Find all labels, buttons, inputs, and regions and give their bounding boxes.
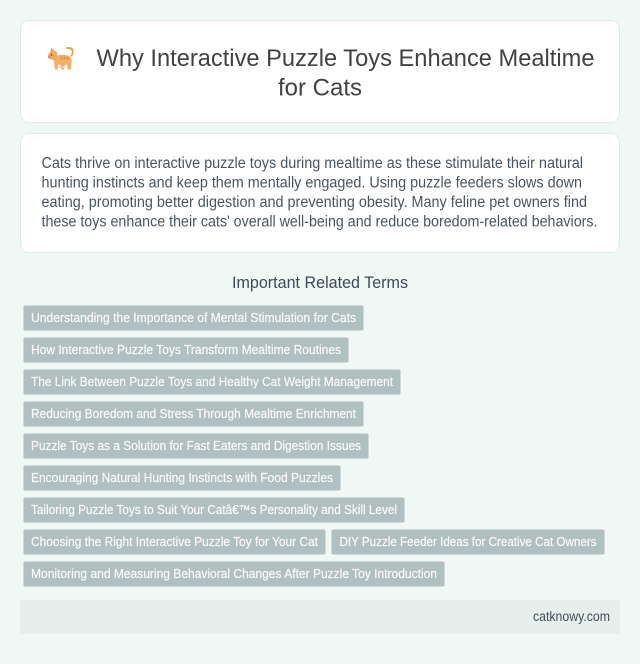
heading: important related terms: Important Related Terms [232, 274, 408, 292]
tag 5 [24, 434, 368, 458]
tag 2: How Interactive Puzzle Toys Transform Mealtime Routines [31, 343, 341, 357]
title text [96, 45, 594, 102]
tag 9 [332, 530, 604, 554]
tag 4 [24, 402, 364, 426]
tag 8 [24, 530, 326, 554]
tag 7: Tailoring Puzzle Toys to Suit Your Catâ€™s Personality and Skill Level [31, 503, 397, 517]
tag 4: Reducing Boredom and Stress Through Mealtime Enrichment [31, 407, 356, 421]
tag 7 [24, 498, 404, 522]
tag 6 [24, 466, 340, 490]
description text [42, 155, 598, 230]
tag 1 [24, 306, 364, 330]
tag 2 [24, 338, 348, 362]
description text: hunting instincts and keep them mentally engaged. Using puzzle feeders slows down [42, 174, 582, 192]
description text: these toys enhance their cats' overall well-being and reduce boredom-related behaviors. [42, 214, 598, 230]
tag 10: Monitoring and Measuring Behavioral Changes After Puzzle Toy Introduction [31, 567, 437, 581]
tag 3: The Link Between Puzzle Toys and Healthy Cat Weight Management [31, 375, 393, 389]
tag list [24, 306, 604, 586]
description text: Cats thrive on interactive puzzle toys during mealtime as these stimulate their natural [42, 155, 583, 172]
footer source: catknowy.com [533, 609, 610, 624]
panel: description card [20, 134, 620, 252]
tag 10 [24, 562, 444, 586]
tag 9: DIY Puzzle Feeder Ideas for Creative Cat Owners [340, 535, 596, 549]
tag 3 [24, 370, 400, 394]
tag 8: Choosing the Right Interactive Puzzle Toy for Your Cat [31, 535, 318, 549]
tag 5: Puzzle Toys as a Solution for Fast Eaters and Digestion Issues [31, 439, 361, 453]
footer bar [20, 600, 620, 634]
description text: eating, promoting better digestion and preventing obesity. Many feline pet owners find [42, 194, 587, 211]
title text: Why Interactive Puzzle Toys Enhance Mealtime [96, 45, 594, 72]
panel: title card [20, 20, 620, 122]
tag 1: Understanding the Importance of Mental Stimulation for Cats [31, 311, 356, 325]
title text: for Cats [278, 74, 362, 102]
tag 6: Encouraging Natural Hunting Instincts with Food Puzzles [31, 471, 333, 485]
icon: orange cat [48, 47, 74, 70]
